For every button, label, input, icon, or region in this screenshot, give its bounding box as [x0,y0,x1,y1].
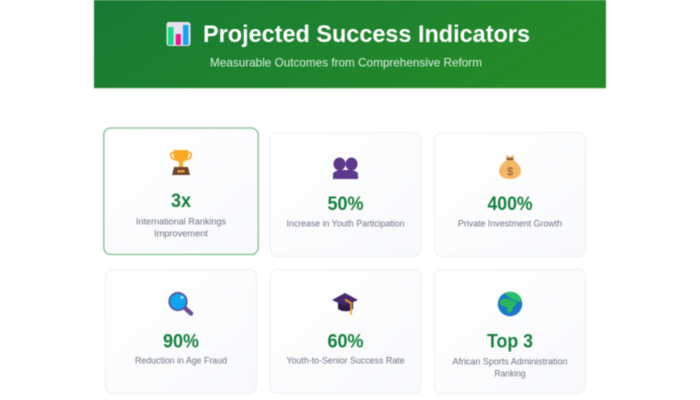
value: 400% [488,193,532,215]
title: Projected Success Indicators [203,21,530,48]
icon: money bag [499,155,521,179]
label: Youth-to-Senior Success Rate [286,356,404,366]
value: 50% [328,193,364,215]
value: Top 3 [487,330,533,352]
label: African Sports Administration [452,356,568,366]
icon: money bag: $ [507,166,513,178]
value: 3x [171,190,191,212]
icon: trophy [171,150,191,175]
value: 90% [163,330,199,352]
panel: youth participation [270,132,421,256]
panel: age fraud [106,270,256,394]
subtitle: Measurable Outcomes from Comprehensive Reform [210,56,482,70]
icon: bar chart [166,22,190,46]
icon: globe [498,292,522,316]
label: International Rankings [136,216,226,226]
label: Reduction in Age Fraud [135,356,227,366]
panel: private investment [434,132,586,256]
icon: two people [333,158,358,179]
panel: international rankings: Improvement [154,228,209,238]
icon: graduation cap [332,293,358,315]
panel: international rankings [104,128,258,254]
icon: magnifying glass [169,293,191,314]
panel: african ranking [434,270,586,394]
header banner [94,0,606,89]
panel: african ranking: Ranking [494,368,526,378]
label: Increase in Youth Participation [286,218,404,228]
panel: youth-to-senior [270,270,421,394]
label: Private Investment Growth [458,218,562,228]
value: 60% [328,330,364,352]
